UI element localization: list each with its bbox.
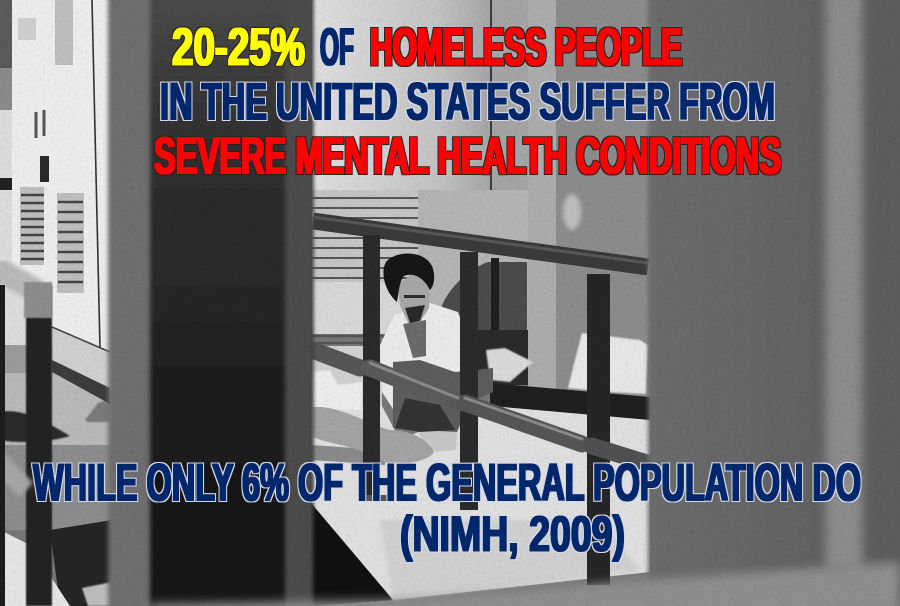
cabinet vent left xyxy=(20,187,44,265)
platform surface xyxy=(311,405,650,606)
man: hair xyxy=(383,253,434,302)
man: lap cloth and arms xyxy=(393,360,493,432)
man: shorts xyxy=(410,412,458,452)
blurred foreground: bottom rail xyxy=(150,562,900,606)
railing: front rail xyxy=(315,351,650,464)
headline line 1 xyxy=(172,18,682,77)
white bag by the pillar xyxy=(568,333,648,394)
plastic bags xyxy=(311,348,533,410)
blurred foreground: right post xyxy=(648,0,900,606)
background: left building edge and ground xyxy=(0,0,112,606)
headline line 1: OF xyxy=(320,18,354,77)
man: shirt xyxy=(380,303,480,420)
headline line 1: 20-25% xyxy=(172,18,305,77)
man: face xyxy=(397,274,430,323)
railing: posts xyxy=(358,235,610,585)
dark textured wall patch xyxy=(418,190,528,385)
railing: rear rail xyxy=(313,221,648,267)
man: thigh and knee xyxy=(313,407,434,464)
headline line 1: HOMELESS PEOPLE xyxy=(370,18,682,77)
background wall xyxy=(312,0,652,400)
man: bare chest xyxy=(403,320,426,358)
man sitting xyxy=(313,253,493,464)
electrical cabinet xyxy=(12,0,112,404)
headline xyxy=(154,18,781,186)
foreground left railing xyxy=(0,268,52,606)
dark ledge xyxy=(490,383,650,422)
blurred foreground: central posts xyxy=(108,0,313,606)
wall vent and panel xyxy=(312,190,418,406)
source citation: (NIMH, 2009) xyxy=(400,506,625,562)
cabinet vent right xyxy=(57,193,84,293)
